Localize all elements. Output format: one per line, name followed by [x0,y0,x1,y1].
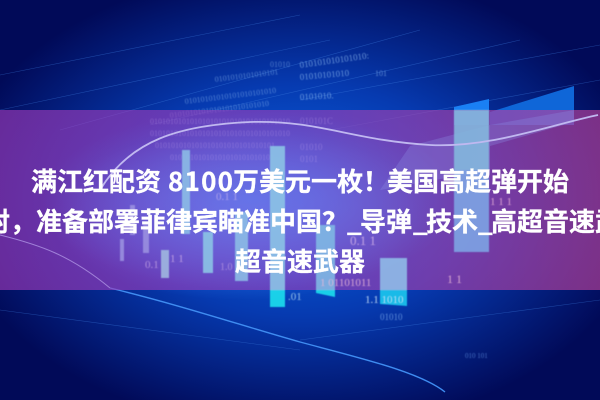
binary digits: chart values: 0.1 1 [350,233,376,248]
title line 3: 超音速武器 [235,242,365,279]
binary digits: chart values: 1.1 1010 [365,294,404,306]
title line 2: _ [478,202,493,239]
title [0,162,600,279]
binary digits: chart values: 1 1 [447,272,462,286]
binary digits: chart values: 1.0 [220,262,232,273]
binary digits: upper: 01010101010 [299,68,350,82]
binary digits: band texture [150,116,333,164]
binary digits: chart values: 1 1 1 [490,196,512,208]
title line 1: 8100 [168,162,234,199]
binary digits: chart values: 0.1 [145,259,159,271]
title line 2: 技术 [426,202,478,239]
title line 1: 满江红配资 [31,162,161,199]
title line 1: 万美元一枚！ [233,162,389,199]
title line 2 [0,202,600,239]
binary digits: band texture: 01010 [300,142,323,152]
binary digits: band texture: 010101C [300,116,333,126]
trend line: lower [110,288,445,392]
binary digits: upper: 0101010101010101010101010 [169,99,269,120]
binary digits: chart values: 01010 [380,312,403,322]
binary digits: chart values: 1 01101011 [320,277,371,289]
binary digits: upper [169,50,387,120]
title line 1 [31,162,569,199]
binary digits: band texture: 0101 [300,154,318,164]
binary digits: upper: 0101010. [300,90,334,102]
title line 2: _ [413,202,428,239]
binary digits: band texture: 01010101010101010101010101010101010 [150,117,290,126]
chart bars [120,110,489,307]
lighter chart polygon [380,110,574,190]
binary digits: band texture: 010101010101010101010101010101 [155,141,275,150]
binary digits: chart values [145,191,512,360]
binary digits: chart values: 010 101 [465,352,488,360]
binary digits: chart values: .01 [288,291,302,303]
overlay band [0,110,600,290]
binary digits: upper: 01010 [270,60,290,69]
binary digits: chart values: 1 1 [170,253,184,265]
binary digits: upper: 101 [375,69,387,78]
top bars [454,86,574,125]
title line 2: 导弹 [360,202,412,239]
title line 1: 美国高超弹开始 [387,162,569,199]
title line 2: _ [347,202,362,239]
binary digits: band texture: 01010101010101010101010101 [170,153,274,162]
title line 2: 准备部署菲律宾瞄准中国？ [36,202,348,239]
binary digits: upper: 01010101010101010101010 [184,86,277,106]
binary digits: upper: 010101010101010: [299,50,370,70]
band glow [40,110,460,290]
binary digits: band texture: 01010101010101010101010101010101010 [150,129,290,138]
binary digits: chart values: 0.1 1 [216,191,238,203]
trend lines [0,115,598,288]
binary digits: upper: 0101010101010101 [214,67,279,84]
